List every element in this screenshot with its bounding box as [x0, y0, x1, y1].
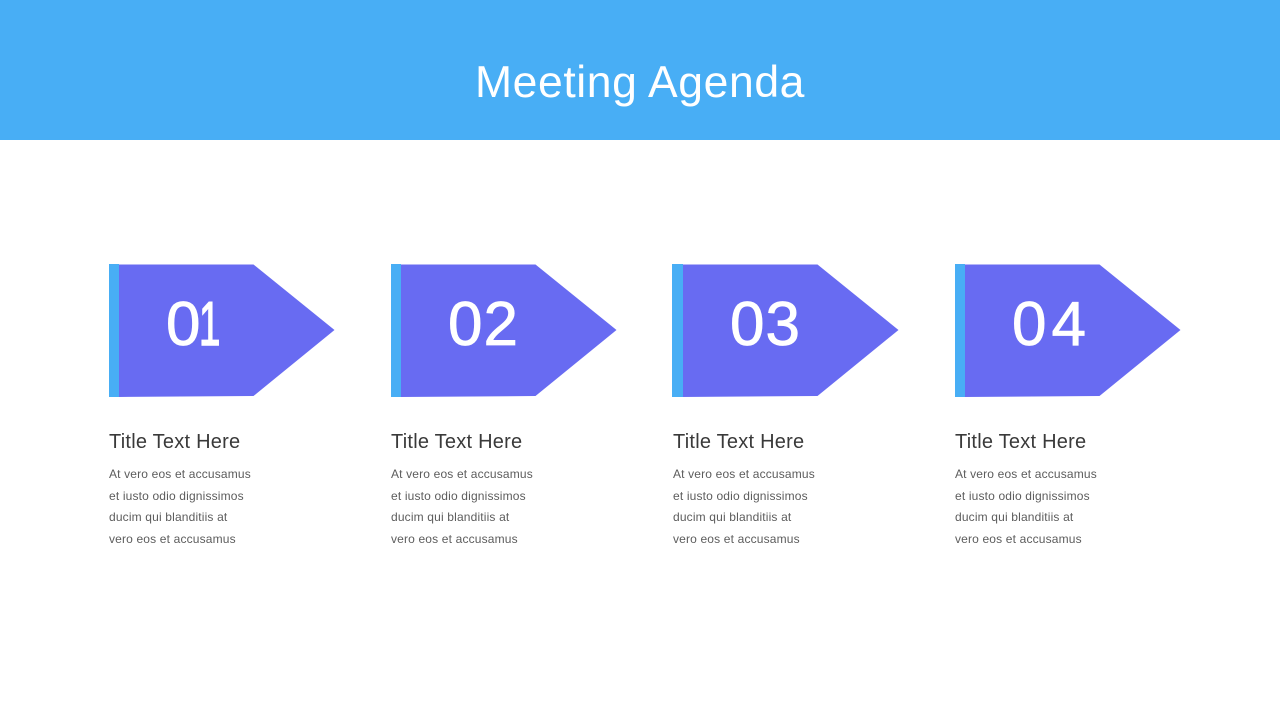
title: Meeting Agenda [475, 58, 805, 107]
item text 02: ducim qui blanditiis at [391, 510, 509, 524]
arrow shape 04 [955, 264, 1180, 397]
item text 01: ducim qui blanditiis at [109, 510, 227, 524]
arrow shape 03 [672, 264, 898, 397]
header band [0, 0, 1280, 140]
number 03: 03 [730, 290, 801, 359]
number 01: 0 [166, 290, 200, 359]
item text 01: vero eos et accusamus [109, 532, 236, 546]
item text 02: vero eos et accusamus [391, 532, 518, 546]
item text 03 [673, 467, 815, 546]
item text 01: et iusto odio dignissimos [109, 489, 244, 503]
item text 02: et iusto odio dignissimos [391, 489, 526, 503]
item text 01 [109, 467, 251, 546]
arrow shape 01 [109, 264, 334, 397]
panel: agenda item 03 [672, 264, 898, 546]
panel: agenda item 04 [955, 264, 1180, 546]
item text 04 [955, 467, 1097, 546]
number 01 [166, 290, 221, 359]
item text 03: et iusto odio dignissimos [673, 489, 808, 503]
item text 01: At vero eos et accusamus [109, 467, 251, 481]
item text 03: vero eos et accusamus [673, 532, 800, 546]
number 02: 02 [448, 290, 519, 359]
item text 02: At vero eos et accusamus [391, 467, 533, 481]
item text 02 [391, 467, 533, 546]
item heading 03: Title Text Here [673, 431, 804, 453]
item heading 02: Title Text Here [391, 431, 522, 453]
item text 04: et iusto odio dignissimos [955, 489, 1090, 503]
panel: agenda item 01 [109, 264, 334, 546]
item text 04: ducim qui blanditiis at [955, 510, 1073, 524]
item text 03: At vero eos et accusamus [673, 467, 815, 481]
item text 03: ducim qui blanditiis at [673, 510, 791, 524]
item heading 04: Title Text Here [955, 431, 1086, 453]
number 01: 1 [199, 290, 221, 359]
number 04: 04 [1012, 290, 1091, 359]
item heading 01: Title Text Here [109, 431, 240, 453]
arrow shape 02 [391, 264, 616, 397]
item text 04: vero eos et accusamus [955, 532, 1082, 546]
item text 04: At vero eos et accusamus [955, 467, 1097, 481]
panel: agenda item 02 [391, 264, 616, 546]
